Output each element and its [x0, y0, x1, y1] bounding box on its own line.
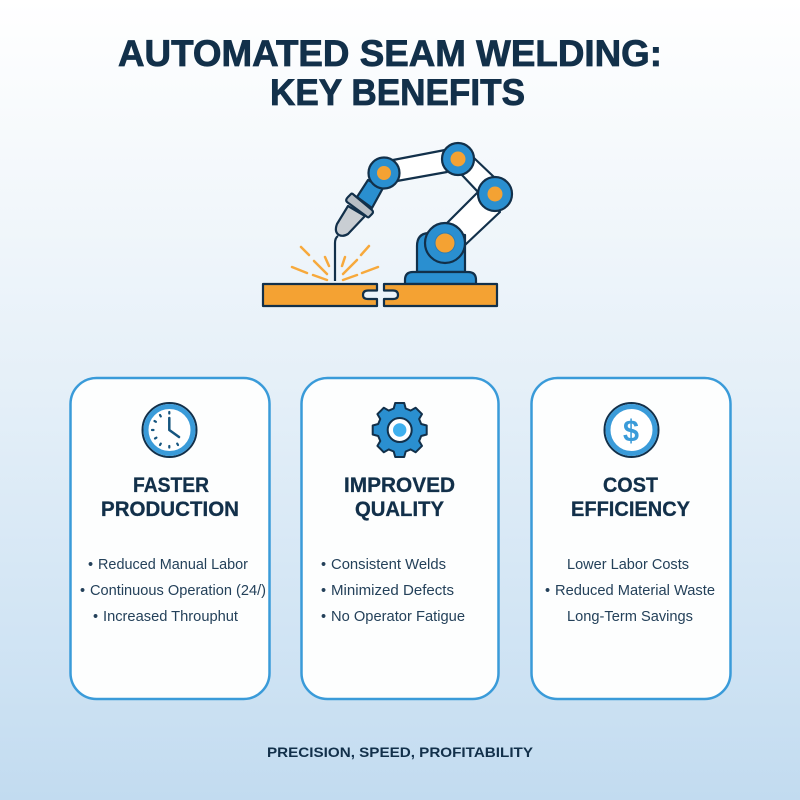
base plate [405, 272, 476, 284]
bullet list: • [321, 609, 326, 625]
bullet list [321, 557, 465, 625]
bullet list: Consistent Welds [331, 557, 446, 573]
heading [344, 474, 455, 521]
bullet list: Increased Throuphut [103, 609, 238, 625]
heading [571, 474, 690, 521]
bullet list [80, 557, 266, 625]
bullet list: Lower Labor Costs [567, 557, 689, 573]
welding torch [335, 180, 383, 281]
illustration: robotic welding arm [263, 143, 512, 306]
title [118, 33, 662, 113]
bullet list: • [80, 583, 85, 599]
joints [368, 158, 400, 188]
bullet list: Reduced Manual Labor [98, 557, 248, 573]
heading: QUALITY [355, 498, 444, 521]
heading [101, 474, 239, 521]
title: AUTOMATED SEAM WELDING: [118, 33, 662, 74]
workpiece plates [263, 284, 497, 306]
bullet list: • [545, 583, 550, 599]
heading: COST [603, 474, 658, 497]
icon: dollar coin: $ [623, 413, 639, 448]
footer tagline: PRECISION, SPEED, PROFITABILITY [267, 744, 534, 760]
bullet list: Continuous Operation (24/) [90, 583, 266, 599]
panel: cost efficiency [532, 378, 730, 699]
icon: dollar coin [604, 403, 658, 457]
bullet list: • [321, 583, 326, 599]
bullet list: • [321, 557, 326, 573]
bullet list: Long-Term Savings [567, 609, 693, 625]
panel: faster production [70, 378, 270, 699]
heading: EFFICIENCY [571, 498, 690, 521]
bullet list: Minimized Defects [331, 583, 454, 599]
icon: clock [142, 403, 196, 457]
panel: improved quality [302, 378, 498, 699]
icon: sparks [292, 246, 378, 280]
bullet list: No Operator Fatigue [331, 609, 465, 625]
heading: PRODUCTION [101, 498, 239, 521]
bullet list [545, 557, 715, 625]
bullet list: • [88, 557, 93, 573]
bullet list: Reduced Material Waste [555, 583, 715, 599]
heading: IMPROVED [344, 474, 455, 497]
title: KEY BENEFITS [270, 72, 525, 113]
bullet list: • [93, 609, 98, 625]
arm links [393, 150, 500, 245]
base pedestal [417, 233, 465, 272]
icon: gear [373, 403, 427, 457]
heading: FASTER [133, 474, 209, 497]
